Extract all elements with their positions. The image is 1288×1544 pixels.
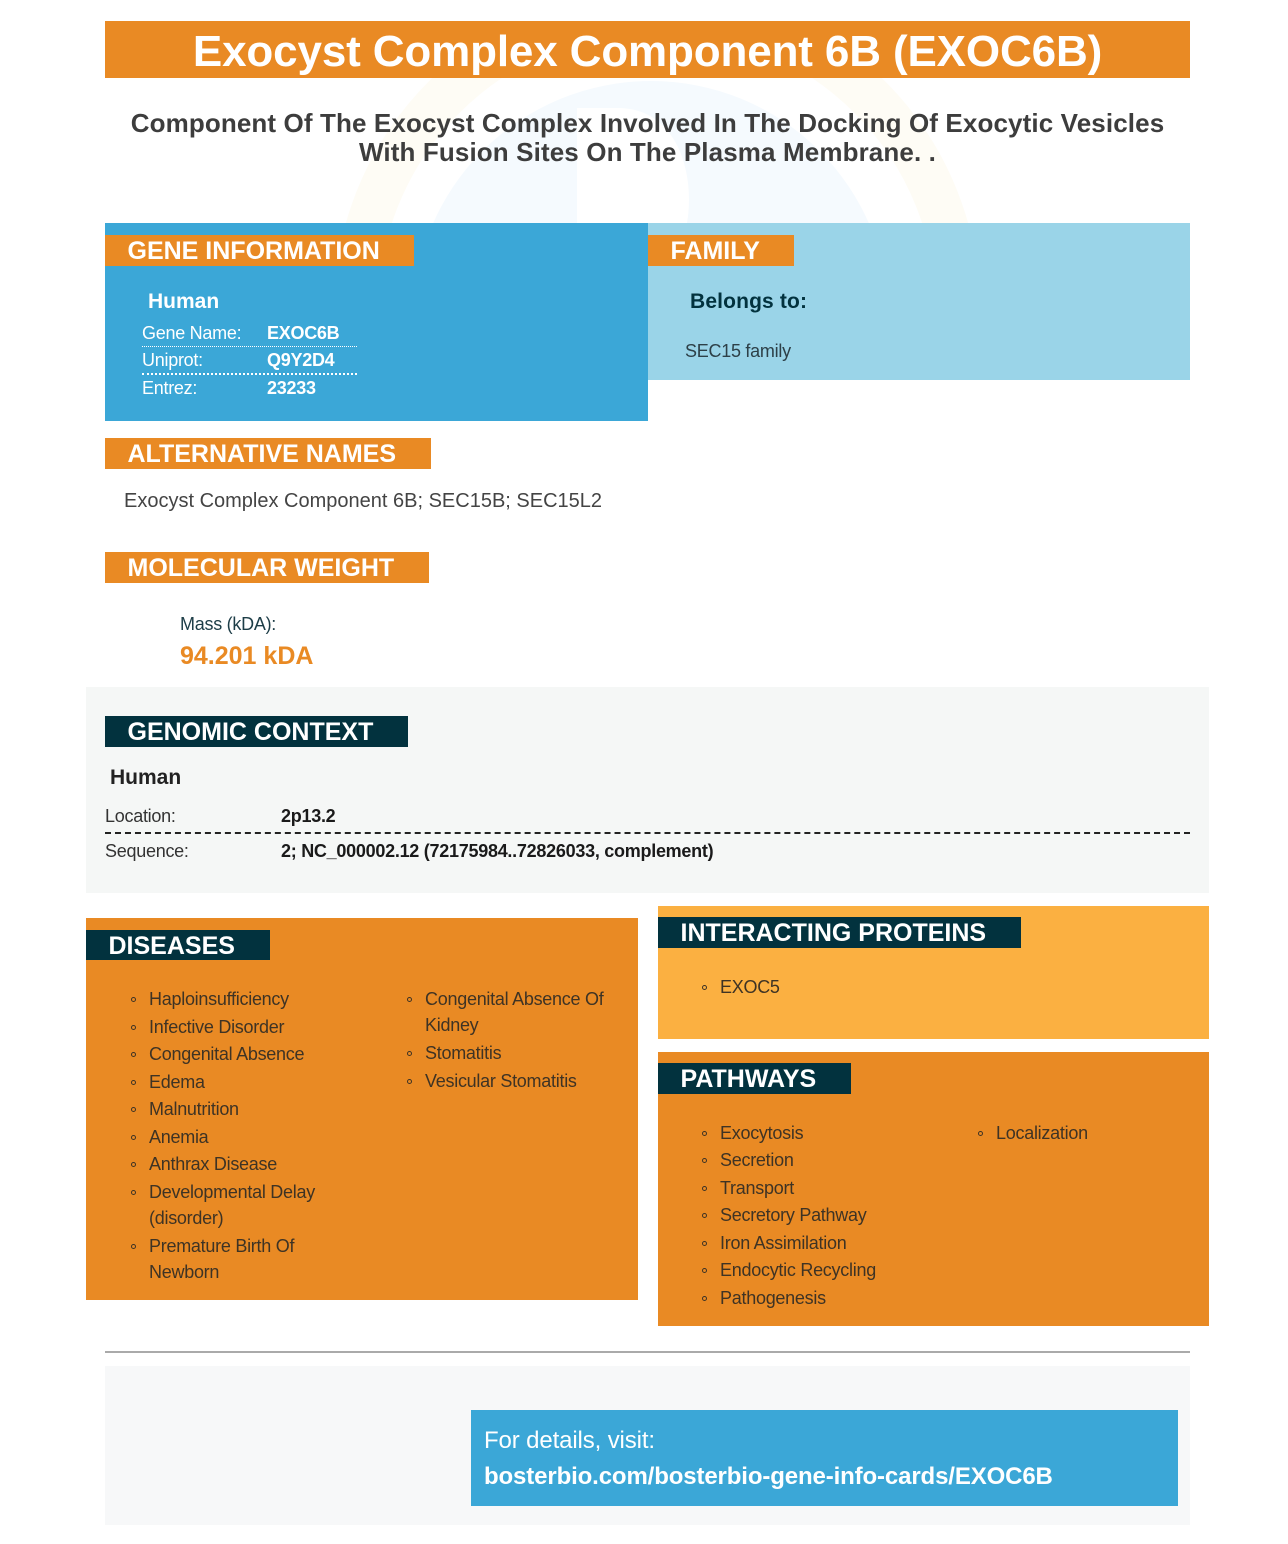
pathway list column 1: Iron Assimilation <box>720 1233 846 1253</box>
pathway list column 2: Localization <box>996 1123 1088 1143</box>
location row <box>105 803 1190 834</box>
callout url: bosterbio.com/bosterbio-gene-info-cards/EXOC6B <box>484 1463 1053 1490</box>
subtitle: With Fusion Sites On The Plasma Membrane. . <box>359 137 936 167</box>
pathway list column 1: Endocytic Recycling <box>720 1260 876 1280</box>
disease list column 1: Anthrax Disease <box>149 1154 277 1174</box>
belongs to label: Belongs to: <box>690 290 807 313</box>
uniprot row: Q9Y2D4 <box>267 350 334 370</box>
gene name row: Gene Name: <box>142 323 241 343</box>
panel: interacting proteins <box>658 906 1209 1039</box>
pathway list column 1: Exocytosis <box>720 1123 803 1143</box>
heading: family: FAMILY <box>670 237 760 265</box>
disease list column 1: Developmental Delay <box>149 1182 315 1202</box>
panel: diseases <box>86 918 638 1300</box>
alternative names text: Exocyst Complex Component 6B; SEC15B; SEC15L2 <box>124 490 602 512</box>
heading: interacting proteins: INTERACTING PROTEINS <box>680 919 986 947</box>
pathway list column 1: Transport <box>720 1178 794 1198</box>
disease list column 1: Haploinsufficiency <box>149 989 289 1009</box>
heading: family <box>648 235 794 266</box>
disease list column 1: Infective Disorder <box>149 1017 284 1037</box>
disease list column 2: Kidney <box>425 1015 478 1035</box>
disease list column 2: Congenital Absence Of <box>425 989 603 1009</box>
sequence row: 2; NC_000002.12 (72175984..72826033, complement) <box>281 841 713 861</box>
heading: molecular weight: MOLECULAR WEIGHT <box>128 554 394 582</box>
heading: alternative names: ALTERNATIVE NAMES <box>128 440 396 468</box>
entrez row <box>142 378 316 398</box>
disease list column 1: Congenital Absence <box>149 1044 304 1064</box>
interacting protein item: EXOC5 <box>720 977 780 997</box>
disease list column 1: Edema <box>149 1072 205 1092</box>
watermark logo <box>346 78 968 223</box>
disease list column 1: Newborn <box>149 1262 219 1282</box>
location row: 2p13.2 <box>281 806 335 826</box>
sequence row: Sequence: <box>105 841 189 861</box>
location row: Location: <box>105 806 176 826</box>
pathway list column 1: Pathogenesis <box>720 1288 826 1308</box>
disease list column 2: Stomatitis <box>425 1043 501 1063</box>
disease list column 1 <box>131 989 316 1282</box>
heading: diseases: DISEASES <box>108 932 235 960</box>
heading: genomic context: GENOMIC CONTEXT <box>128 718 373 746</box>
gene name row <box>142 320 357 347</box>
callout: details link <box>471 1410 1178 1506</box>
species label: Human <box>110 766 181 789</box>
disease list column 1: Anemia <box>149 1127 208 1147</box>
disease list column 1: Premature Birth Of <box>149 1236 294 1256</box>
heading: pathways: PATHWAYS <box>680 1065 816 1093</box>
subtitle <box>131 108 1164 167</box>
title: Exocyst Complex Component 6B (EXOC6B) <box>193 27 1102 76</box>
subtitle: Component Of The Exocyst Complex Involved In The Docking Of Exocytic Vesicles <box>131 108 1164 138</box>
uniprot row: Uniprot: <box>142 350 203 370</box>
mass value: 94.201 kDA <box>180 642 313 670</box>
disease list column 1: (disorder) <box>149 1208 223 1228</box>
panel: family <box>648 223 1190 380</box>
gene name row: EXOC6B <box>267 323 339 343</box>
heading: pathways <box>658 1063 851 1094</box>
mass label: Mass (kDA): <box>180 614 276 634</box>
species label: Human <box>148 290 219 313</box>
pathway list column 1: Secretion <box>720 1150 794 1170</box>
pathway list column 1 <box>702 1123 876 1308</box>
panel: gene information <box>105 223 648 421</box>
divider <box>105 1351 1190 1353</box>
panel: genomic context <box>86 687 1209 893</box>
pathway list column 1: Secretory Pathway <box>720 1205 866 1225</box>
entrez row: Entrez: <box>142 378 197 398</box>
heading: diseases <box>86 930 270 960</box>
callout label: For details, visit: <box>484 1427 655 1454</box>
disease list column 2: Vesicular Stomatitis <box>425 1071 577 1091</box>
panel: pathways <box>658 1052 1209 1326</box>
disease list column 1: Malnutrition <box>149 1099 239 1119</box>
entrez row: 23233 <box>267 378 316 398</box>
disease list column 2 <box>407 989 604 1091</box>
heading: gene information: GENE INFORMATION <box>128 237 380 265</box>
uniprot row <box>142 347 357 375</box>
family name: SEC15 family <box>685 341 791 361</box>
panel: footer <box>105 1366 1190 1525</box>
